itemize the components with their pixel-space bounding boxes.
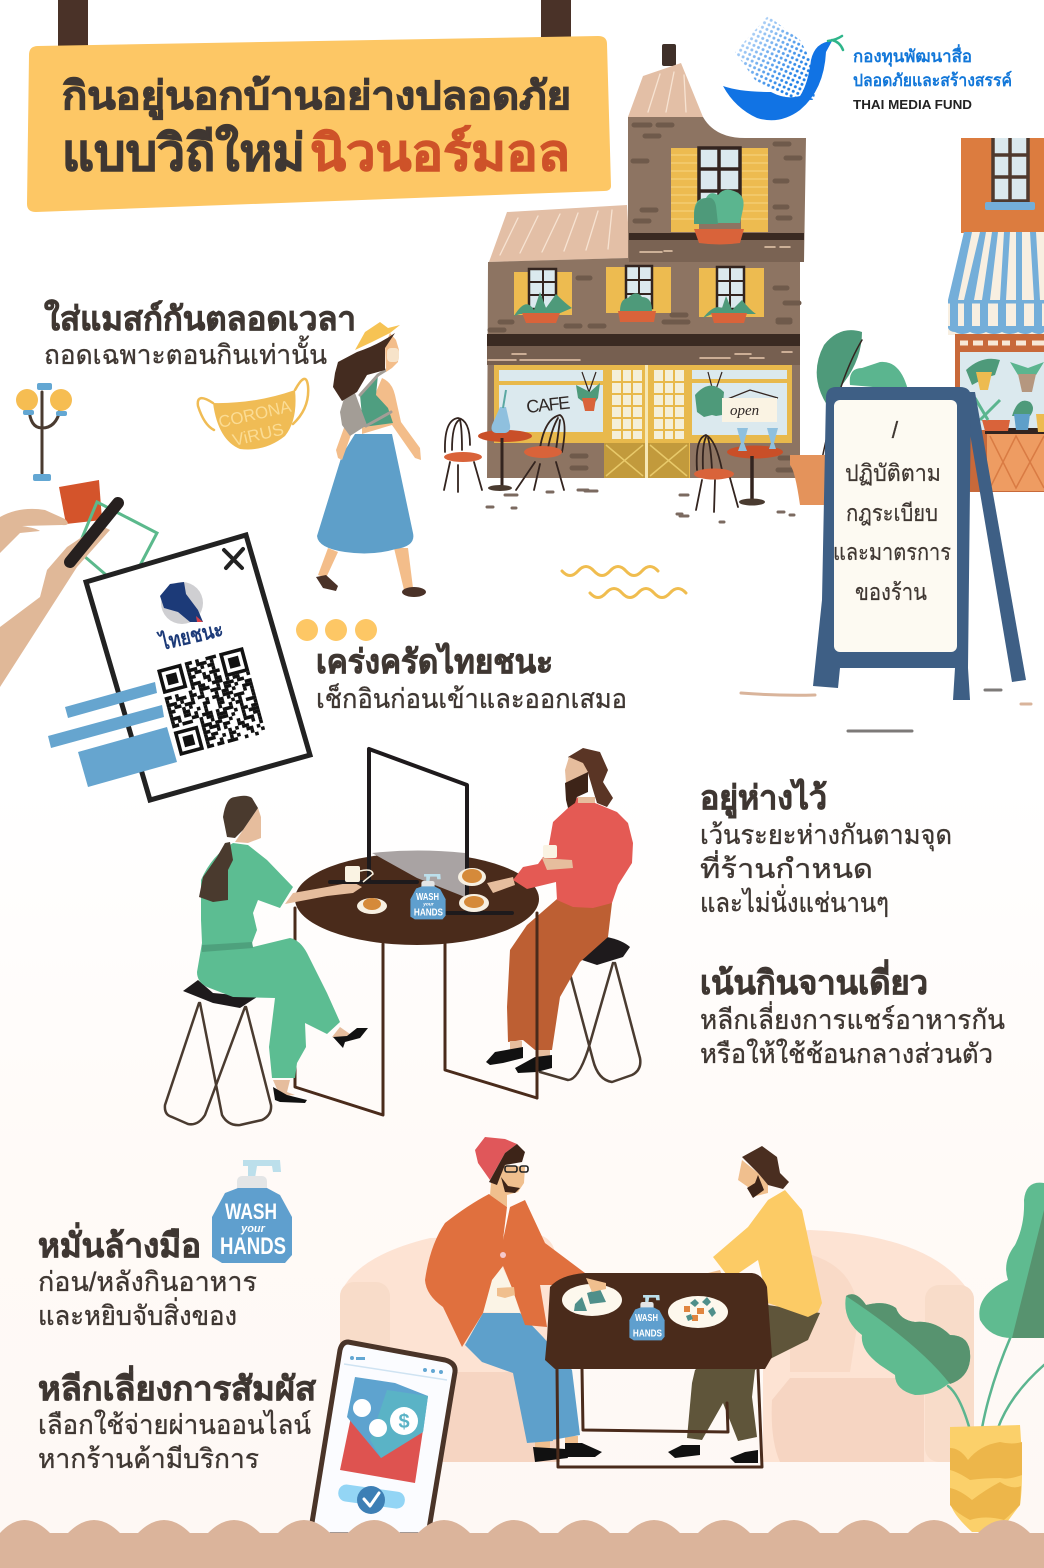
sofa right xyxy=(763,1230,974,1462)
title line 1: กินอยู่นอกบ้านอย่างปลอดภัย xyxy=(62,75,571,120)
tip: hand washing text: ก่อน/หลังกินอาหาร xyxy=(38,1267,257,1297)
logo text xyxy=(853,44,1012,112)
icon: corona mask: CORONA xyxy=(217,397,294,432)
sign text: กฎระเบียบ xyxy=(846,500,938,526)
sign text: ของร้าน xyxy=(855,579,927,605)
blue text blocks xyxy=(48,682,177,787)
phone edge xyxy=(70,503,118,562)
stool right xyxy=(540,937,640,1082)
tower roof xyxy=(628,63,703,117)
confirm button xyxy=(337,1483,406,1510)
man with hat xyxy=(425,1137,606,1462)
logo text: ปลอดภัยและสร้างสรรค์ xyxy=(853,70,1012,90)
tip: single dish text: หลีกเลี่ยงการแชร์อาหารกัน xyxy=(700,1001,1005,1035)
icon: soap bottle xyxy=(410,874,446,919)
tip: avoid contact text xyxy=(38,1365,317,1474)
open sign xyxy=(725,390,778,400)
title banner xyxy=(27,0,611,212)
logo: Thai Media Fund xyxy=(723,16,1012,120)
icon: wash your hands bottle: WASH xyxy=(225,1199,277,1224)
logo text: กองทุนพัฒนาสื่อ xyxy=(853,44,972,67)
close icon xyxy=(224,549,243,568)
left roof xyxy=(489,205,630,262)
small windows xyxy=(514,266,764,323)
tip: hand washing text: และหยิบจับสิ่งของ xyxy=(38,1297,237,1331)
red square xyxy=(59,480,102,524)
icon: soap bottle: your xyxy=(422,902,435,908)
A-frame sign xyxy=(813,387,1026,700)
icon: wash your hands bottle: HANDS xyxy=(220,1233,286,1260)
ground strokes xyxy=(741,690,1031,731)
tip: distance text: ที่ร้านกำหนด xyxy=(700,850,873,884)
tip: avoid contact text: หลีกเลี่ยงการสัมผัส xyxy=(38,1365,317,1407)
tip: avoid contact text: หากร้านค้ามีบริการ xyxy=(38,1444,259,1474)
tip: Thai Chana text: เช็กอินก่อนเข้าและออกเสมอ xyxy=(316,681,627,714)
icon: table soap: HANDS xyxy=(633,1327,662,1339)
icon: blue dove xyxy=(723,16,843,120)
icon: wash your hands bottle: your xyxy=(240,1223,266,1235)
scene: sofa dining xyxy=(340,1137,974,1467)
icon: soap bottle: WASH xyxy=(416,892,439,903)
storefront: open xyxy=(730,403,759,419)
green frame xyxy=(77,502,157,592)
strap left xyxy=(58,0,88,46)
tip: mask text xyxy=(44,299,356,370)
banknotes xyxy=(347,1377,428,1458)
tip: Thai Chana text xyxy=(316,642,627,714)
table items xyxy=(345,866,489,914)
tip: distance text: อยู่ห่างไว้ xyxy=(700,778,827,819)
table back legs xyxy=(295,908,537,1115)
building: cafe xyxy=(444,44,806,522)
table front leg xyxy=(536,913,538,1098)
pot plant behind sign xyxy=(790,330,908,505)
sign text: ปฏิบัติตาม xyxy=(845,460,941,486)
tip: distance text xyxy=(700,778,952,918)
sign text: / xyxy=(892,417,899,443)
logo text: THAI MEDIA FUND xyxy=(853,97,972,112)
Thai Chana label: ไทยชนะ xyxy=(156,616,225,655)
dining table xyxy=(545,1273,772,1467)
hand with phone xyxy=(0,480,157,687)
tip: distance text: เว้นระยะห่างกันตามจุด xyxy=(700,820,952,852)
figure: walking woman xyxy=(316,322,426,597)
scene: table with screen xyxy=(165,748,640,1125)
sofa left xyxy=(340,1235,560,1462)
shop front xyxy=(955,334,1044,492)
tip: hand washing text: หมั่นล้างมือ xyxy=(38,1222,201,1264)
icon: phone payment: $ xyxy=(398,1411,410,1433)
dots: ellipsis xyxy=(296,619,377,641)
sign text xyxy=(833,417,951,605)
icon: street lamp xyxy=(16,383,72,481)
man in red xyxy=(486,748,633,1073)
tip: mask text: ถอดเฉพาะตอนกินเท่านั้น xyxy=(44,335,327,370)
icon: wash your hands bottle xyxy=(212,1160,292,1263)
strap right xyxy=(541,0,571,38)
title line 2: แบบวิถีใหม่ xyxy=(62,124,305,181)
man in yellow xyxy=(668,1146,822,1463)
banner panel xyxy=(27,36,611,212)
back leg xyxy=(963,392,1026,682)
icon: soap bottle: HANDS xyxy=(414,906,443,918)
icon: corona mask xyxy=(198,379,308,450)
icon: table soap: WASH xyxy=(635,1313,658,1324)
tower window xyxy=(671,147,768,244)
table top xyxy=(295,853,539,945)
icon: table soap xyxy=(629,1295,665,1340)
cafe lettering: CAFE xyxy=(525,392,571,417)
plant with vase xyxy=(845,1183,1044,1532)
card: Thai Chana QR xyxy=(48,535,310,800)
hanging plants xyxy=(582,372,722,395)
leaf right xyxy=(979,1183,1044,1338)
icon: phone payment xyxy=(310,1342,455,1535)
awning xyxy=(948,232,1044,335)
street furniture xyxy=(444,390,794,522)
tip: distance text: และไม่นั่งแช่นานๆ xyxy=(700,884,889,918)
bricks xyxy=(490,125,800,470)
dark bands xyxy=(629,233,804,240)
title highlight: นิวนอร์มอล xyxy=(310,125,570,181)
sign text: และมาตรการ xyxy=(833,539,951,565)
chimney xyxy=(662,44,676,66)
tip: single dish text xyxy=(700,959,1005,1069)
squiggles xyxy=(562,566,686,598)
glass screen xyxy=(330,749,512,913)
QR code xyxy=(157,647,266,756)
hand xyxy=(0,509,110,687)
stool left xyxy=(165,980,271,1125)
storefront xyxy=(494,365,792,478)
tip: mask text: ใส่แมสก์กันตลอดเวลา xyxy=(44,299,356,337)
leaf left xyxy=(845,1294,970,1395)
tip: single dish text: เน้นกินจานเดี่ยว xyxy=(700,959,928,1001)
board frame xyxy=(813,387,971,700)
vase xyxy=(950,1425,1022,1532)
building: right shop xyxy=(948,138,1044,492)
tip: Thai Chana text: เคร่งครัดไทยชนะ xyxy=(316,642,553,680)
walls xyxy=(487,117,806,478)
tip: hand washing text xyxy=(38,1222,257,1331)
stems xyxy=(948,1336,1044,1430)
icon: corona mask: ViRUS xyxy=(231,420,286,450)
woman in green xyxy=(197,796,368,1103)
tip: single dish text: หรือให้ใช้ช้อนกลางส่วนตัว xyxy=(700,1038,993,1069)
icon: fist logo xyxy=(160,582,203,624)
hand over plate xyxy=(586,1278,606,1292)
envelope xyxy=(340,1417,423,1483)
bottom scalloped band xyxy=(0,1520,1044,1568)
tip: avoid contact text: เลือกใช้จ่ายผ่านออนไลน์ xyxy=(38,1409,311,1440)
